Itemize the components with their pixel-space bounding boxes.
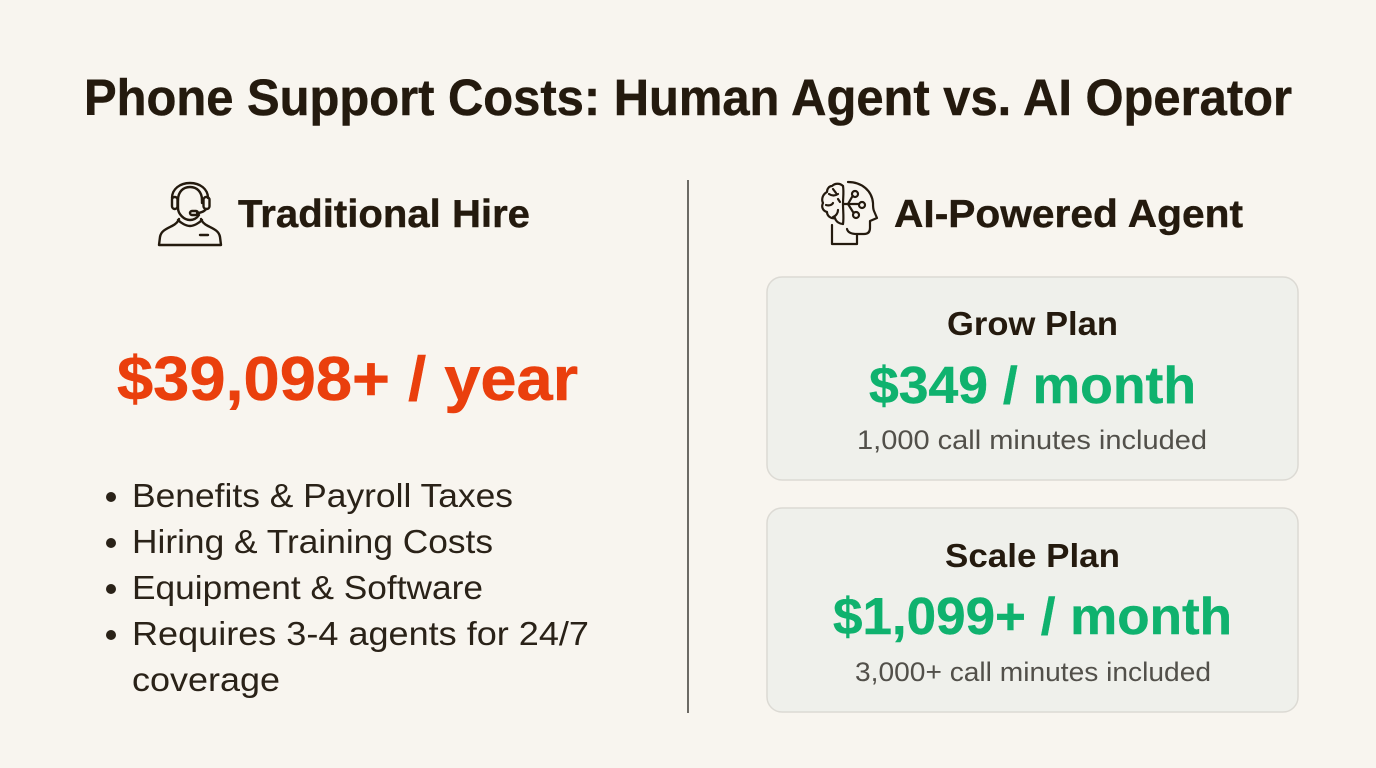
panel: ai-powered agent	[767, 182, 1298, 712]
card: scale plan	[767, 508, 1298, 712]
cost list: Hiring & Training Costs	[132, 523, 493, 560]
icon: ai brain head	[822, 182, 877, 244]
cost list: Benefits & Payroll Taxes	[132, 477, 513, 514]
panel: traditional hire	[106, 183, 589, 698]
price: scale: $1,099+ / month	[833, 588, 1232, 646]
title: Phone Support Costs: Human Agent vs. AI Operator	[84, 69, 1292, 126]
cost list: Equipment & Software	[132, 569, 483, 606]
plan name: scale: Scale Plan	[945, 537, 1120, 574]
cost list	[106, 477, 589, 698]
heading: traditional hire: Traditional Hire	[238, 193, 530, 236]
plan name: grow: Grow Plan	[947, 305, 1118, 342]
cost list: coverage	[132, 661, 280, 698]
minutes: scale: 3,000+ call minutes included	[855, 657, 1211, 687]
card: grow plan	[767, 277, 1298, 480]
heading: ai-powered agent: AI-Powered Agent	[894, 193, 1243, 236]
price: grow: $349 / month	[869, 357, 1196, 415]
price: yearly cost: $39,098+ / year	[117, 345, 578, 414]
icon: headset agent	[159, 183, 221, 245]
minutes: grow: 1,000 call minutes included	[857, 425, 1207, 455]
cost list: Requires 3-4 agents for 24/7	[132, 615, 589, 652]
